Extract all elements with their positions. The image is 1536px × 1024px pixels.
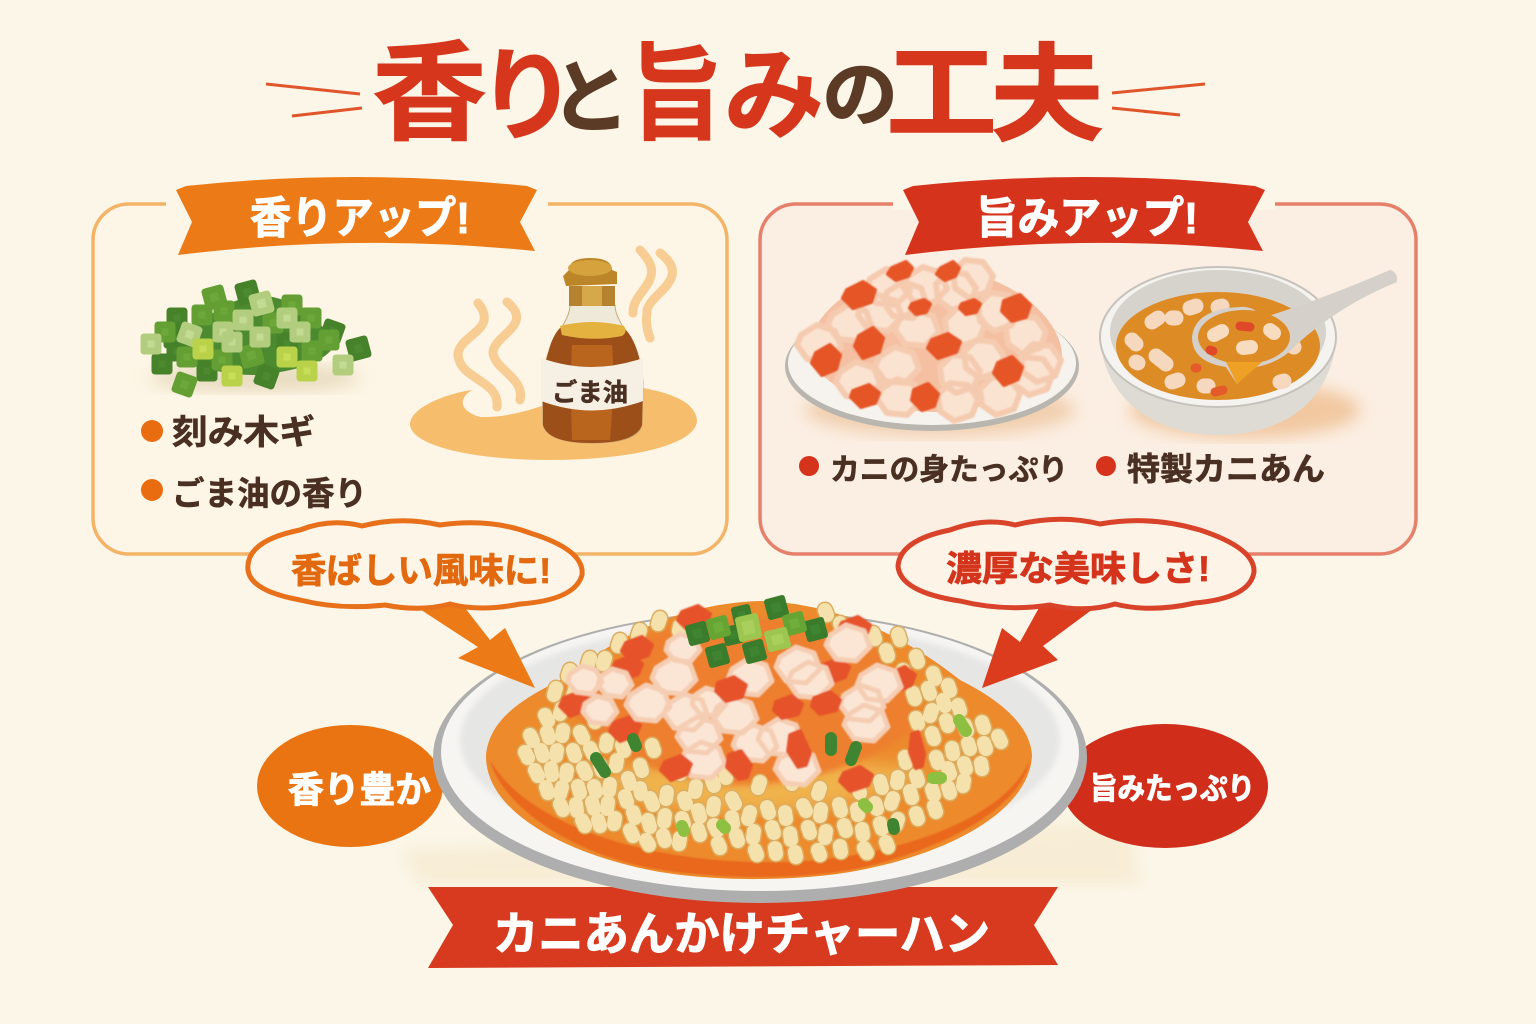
title: み [724,40,824,152]
title [266,33,1205,155]
bullet [141,420,163,442]
ribbon: dish name: カニあんかけチャーハン [493,908,990,960]
sauce and mound [486,601,1032,879]
green onion topping [596,598,966,831]
bullet [799,456,819,476]
icon: bowl of crab sauce with spoon [1100,267,1397,438]
plate [433,611,1087,903]
main dish: crab fried rice [433,598,1087,903]
bullet [141,479,163,501]
ribbon: dish name [428,887,1058,968]
callout arrow: right red [982,606,1097,688]
ribbon heading: aroma up [176,177,537,255]
bullet [1096,456,1116,476]
panel: aroma up [93,177,727,554]
crab meat [560,606,924,791]
ribbon heading: umami up [903,177,1265,255]
badge: rich aroma: 香り豊か [288,769,431,810]
plate shadow [400,820,1140,885]
title: の [822,56,898,136]
badge: full of umami: 旨みたっぷり [1090,773,1255,806]
panel: umami up [760,177,1416,554]
badge: full of umami [1062,724,1268,848]
item: chopped onion: 刻み木ギ [172,414,315,452]
item: plenty of crab meat: カニの身たっぷり [830,454,1068,487]
item: special crab sauce: 特製カニあん [1127,451,1325,487]
speech bubble: rich taste: 濃厚な美味しさ! [946,550,1210,589]
title: 旨 [630,37,723,154]
callout arrow: left orange [412,604,535,688]
rice grains [525,610,1001,857]
badge: rich aroma [257,725,443,847]
speech bubble: fragrant flavor: 香ばしい風味に! [291,552,551,591]
title: と [550,54,630,143]
speech bubble: rich taste [898,519,1254,609]
title: 香 [372,33,487,154]
icon: plate of crab meat [785,260,1079,436]
title: 工 [886,36,997,153]
ribbon heading: umami up: 旨みアップ! [976,194,1198,243]
list: aroma points [141,414,367,512]
icon: sesame oil bottle with steam [410,250,697,460]
speech bubble: fragrant flavor [248,521,582,608]
title: 夫 [990,37,1104,155]
ribbon heading: aroma up: 香りアップ! [250,194,470,243]
icon: chopped green onion pile [144,283,368,394]
title: り [477,41,577,153]
bottle label: ごま油 [552,378,628,407]
item: sesame oil aroma: ごま油の香り [172,475,367,512]
list: umami points [799,451,1325,487]
